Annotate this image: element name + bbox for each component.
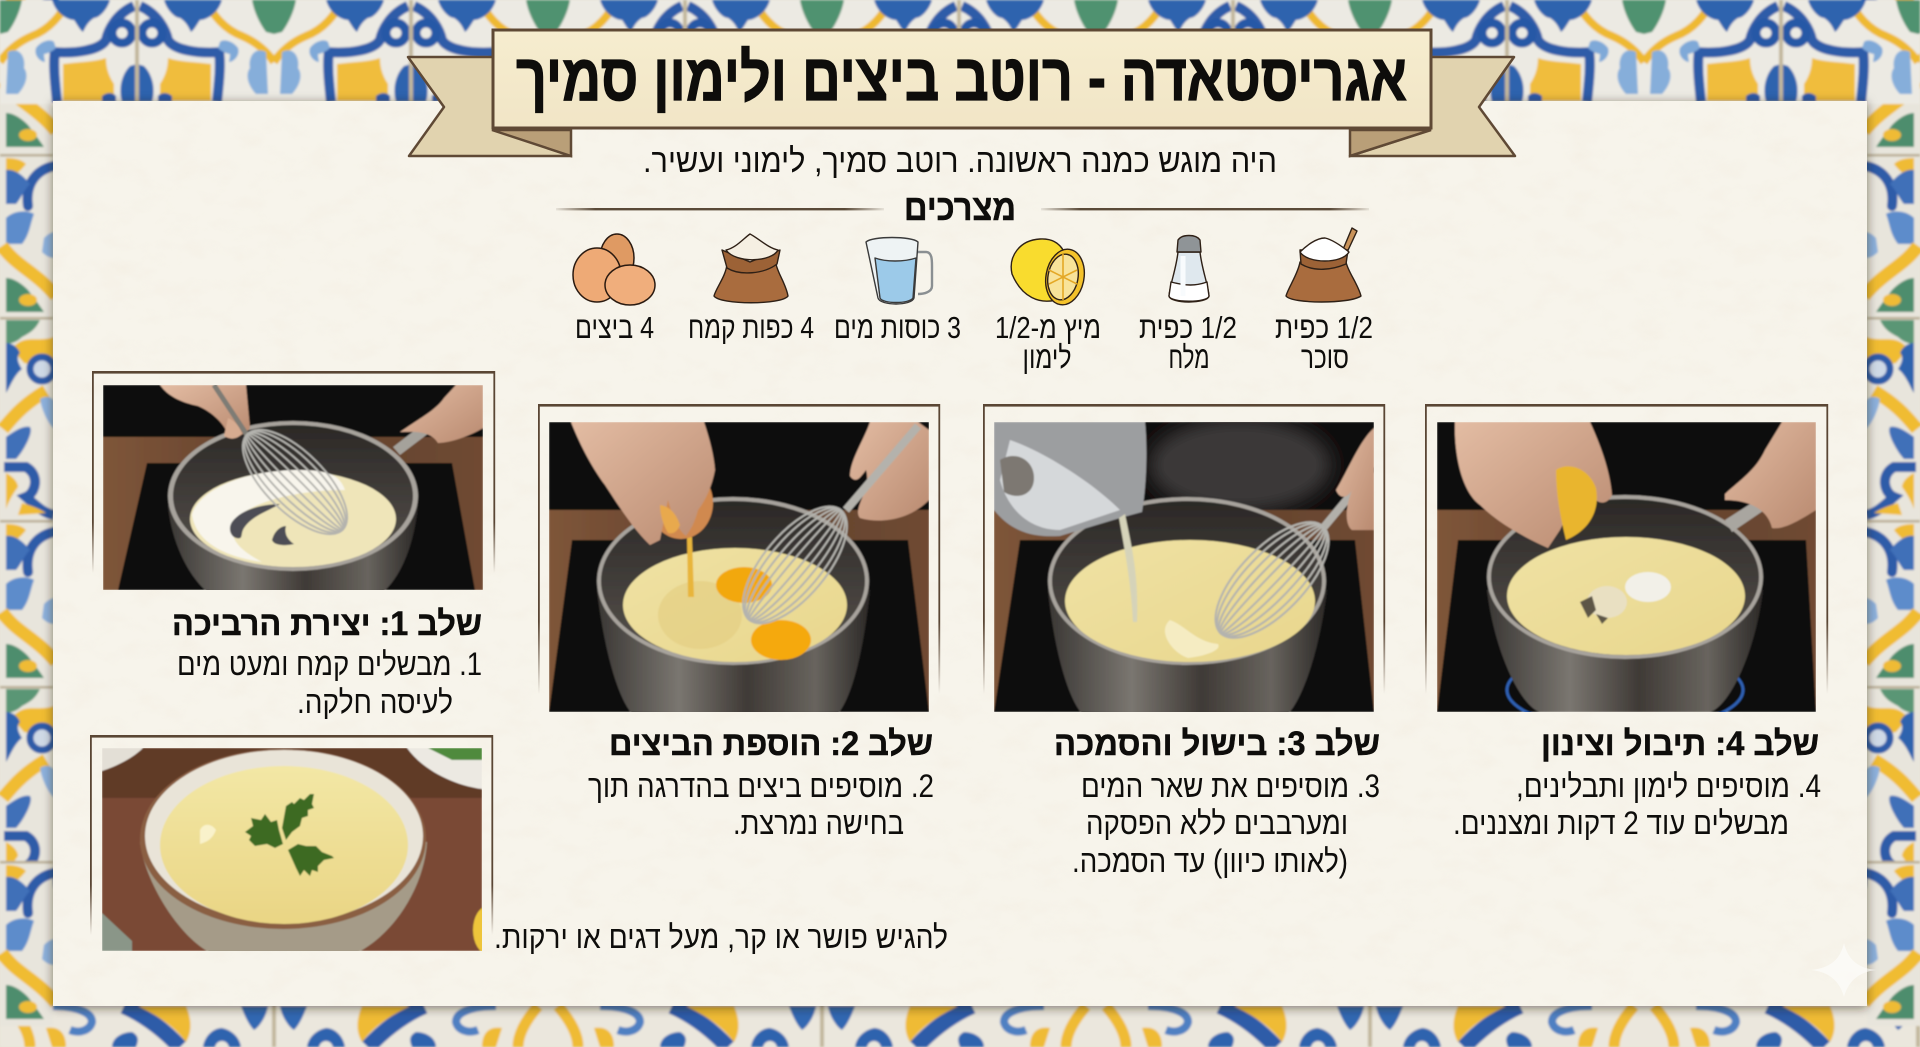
ribbon left tail <box>408 57 571 156</box>
ingredient: flour: 4 כפות קמח <box>688 310 814 345</box>
step 3 card <box>983 404 1385 879</box>
step 3 frame <box>983 404 1385 694</box>
step 2 frame <box>538 404 940 694</box>
icon: flour sack <box>714 234 788 303</box>
dish frame <box>90 735 493 935</box>
ingredients heading: מצרכים <box>904 187 1016 228</box>
step 4 card <box>1425 404 1828 841</box>
step 4 text <box>1453 768 1821 841</box>
step 4 frame <box>1425 404 1828 694</box>
icon: eggs <box>573 234 655 305</box>
icon: salt shaker <box>1169 236 1209 302</box>
step 2 text: 2. מוסיפים ביצים בהדרגה תוך <box>588 768 934 804</box>
step 1 card <box>92 371 495 720</box>
step 1 frame <box>92 371 495 573</box>
ingredient: sugar: 1/2 כפית <box>1275 310 1373 345</box>
final dish card <box>90 735 503 956</box>
ingredient: sugar: סוכר <box>1301 340 1349 375</box>
icon: sugar sack <box>1286 228 1361 302</box>
ingredient: eggs: 4 ביצים <box>575 310 654 345</box>
ingredient: lemon juice: מיץ מ-1/2 <box>995 310 1101 345</box>
dish photo: bowl of sauce <box>102 748 503 956</box>
step 2 text: בחישה נמרצת. <box>733 805 904 841</box>
title text: אגריסטאדה - רוטב ביצים ולימון סמיך <box>516 40 1407 114</box>
ingredient: water: 3 כוסות מים <box>834 310 961 345</box>
title ribbon <box>408 30 1515 156</box>
step 2 photo: adding eggs <box>549 422 929 720</box>
step 2 text <box>588 768 934 841</box>
step 1 text: 1. מבשלים קמח ומעט מים <box>177 646 482 682</box>
ribbon right tail <box>1350 57 1515 156</box>
serving note: להגיש פושר או קר, מעל דגים או ירקות. <box>494 919 948 955</box>
step 1 heading: שלב 1: יצירת הרביכה <box>172 605 482 643</box>
step 3 heading: שלב 3: בישול והסמכה <box>1054 725 1380 763</box>
step 1 text: לעיסה חלקה. <box>297 684 453 720</box>
step 1 text <box>177 646 482 720</box>
ingredient labels <box>575 310 1373 375</box>
step 3 text: ומערבבים ללא הפסקה <box>1086 805 1348 841</box>
ingredient: sugar <box>1275 310 1373 375</box>
step 4 text: מבשלים עוד 2 דקות ומצננים. <box>1453 805 1789 841</box>
step 2 card <box>538 404 940 841</box>
icon: water jug <box>866 238 932 304</box>
icon: lemon <box>1011 239 1089 308</box>
ingredient: salt <box>1139 310 1237 375</box>
step 4 photo: lemon and seasoning <box>1437 422 1816 730</box>
step 2 heading: שלב 2: הוספת הביצים <box>609 725 933 763</box>
step 4 heading: שלב 4: תיבול וצינון <box>1541 725 1819 763</box>
step 3 text: (לאותו כיוון) עד הסמכה. <box>1072 843 1348 879</box>
subtitle: היה מוגש כמנה ראשונה. רוטב סמיך, לימוני ועשיר. <box>643 142 1277 179</box>
ingredient: lemon juice <box>995 310 1101 375</box>
step 4 text: 4. מוסיפים לימון ותבלינים, <box>1516 768 1821 804</box>
step 3 photo: pouring water <box>994 417 1374 720</box>
ingredient: salt: 1/2 כפית <box>1139 310 1237 345</box>
step 3 text <box>1072 768 1380 879</box>
corner sparkle <box>1811 943 1876 997</box>
step 1 photo: whisking flour in pan <box>103 385 483 600</box>
ribbon main band <box>493 30 1431 128</box>
ingredient: lemon juice: לימון <box>1022 340 1072 375</box>
ingredient: salt: מלח <box>1168 340 1210 375</box>
step 3 text: 3. מוסיפים את שאר המים <box>1081 768 1380 804</box>
